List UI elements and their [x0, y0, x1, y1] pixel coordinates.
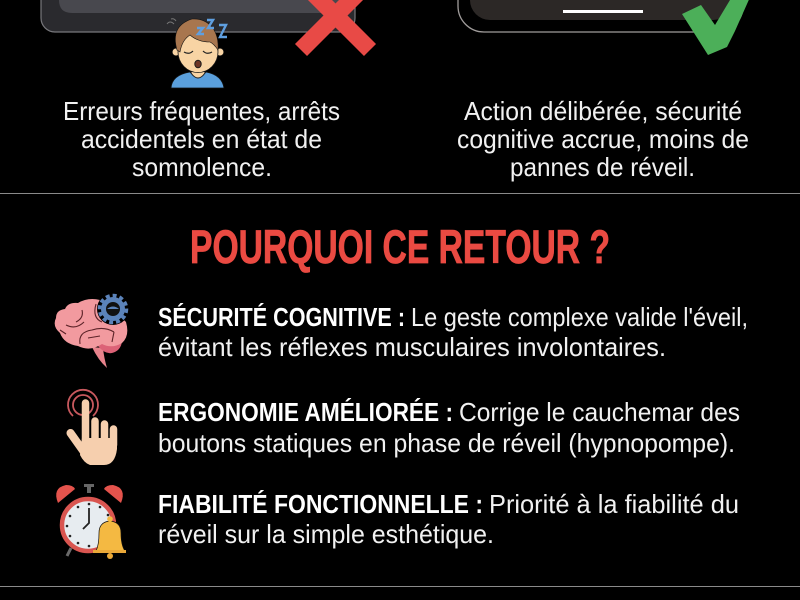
- device: phone bottom edge: [458, 0, 743, 32]
- text: improved ergonomics: boutons statiques en phase de réveil (hypnopompe).: [158, 428, 735, 458]
- icon: tapping hand: [68, 390, 117, 465]
- icon: red cross: [301, 0, 370, 50]
- text: cognitive safety: Le geste complexe valide l'éveil,: [411, 302, 748, 332]
- text: functional reliability: FIABILITÉ FONCTIONNELLE :: [158, 489, 483, 519]
- caption: new interface: pannes de réveil.: [510, 152, 695, 182]
- icon: sleeping person: [167, 19, 227, 88]
- text: cognitive safety: [158, 302, 748, 362]
- icon: green check mark: [682, 0, 751, 55]
- text: cognitive safety: SÉCURITÉ COGNITIVE :: [158, 302, 405, 332]
- icon: alarm clock with bell: [56, 484, 126, 559]
- icon: brain with gear: [55, 293, 129, 368]
- caption: old interface: somnolence.: [132, 152, 272, 182]
- text: functional reliability: réveil sur la simple esthétique.: [158, 519, 494, 549]
- item: cognitive safety: [55, 293, 748, 368]
- panel: old interface comparison: [41, 0, 370, 182]
- text: improved ergonomics: [158, 397, 740, 458]
- caption: old interface: [63, 96, 340, 182]
- device: tablet with static buttons: [41, 0, 355, 32]
- text: improved ergonomics: Corrige le cauchemar des: [459, 397, 740, 427]
- caption: new interface: cognitive accrue, moins de: [457, 124, 749, 154]
- heading: why this return: POURQUOI CE RETOUR ?: [190, 220, 610, 273]
- caption: new interface: Action délibérée, sécurité: [464, 96, 742, 126]
- item: functional reliability: [56, 484, 739, 559]
- caption: new interface: [457, 96, 749, 182]
- text: cognitive safety: évitant les réflexes musculaires involontaires.: [158, 332, 666, 362]
- panel: new interface comparison: [457, 0, 751, 182]
- caption: old interface: Erreurs fréquentes, arrêts: [63, 96, 340, 126]
- text: functional reliability: Priorité à la fiabilité du: [489, 489, 739, 519]
- item: improved ergonomics: [68, 390, 740, 465]
- text: functional reliability: [158, 489, 739, 549]
- text: improved ergonomics: ERGONOMIE AMÉLIORÉE :: [158, 397, 453, 427]
- caption: old interface: accidentels en état de: [81, 124, 322, 154]
